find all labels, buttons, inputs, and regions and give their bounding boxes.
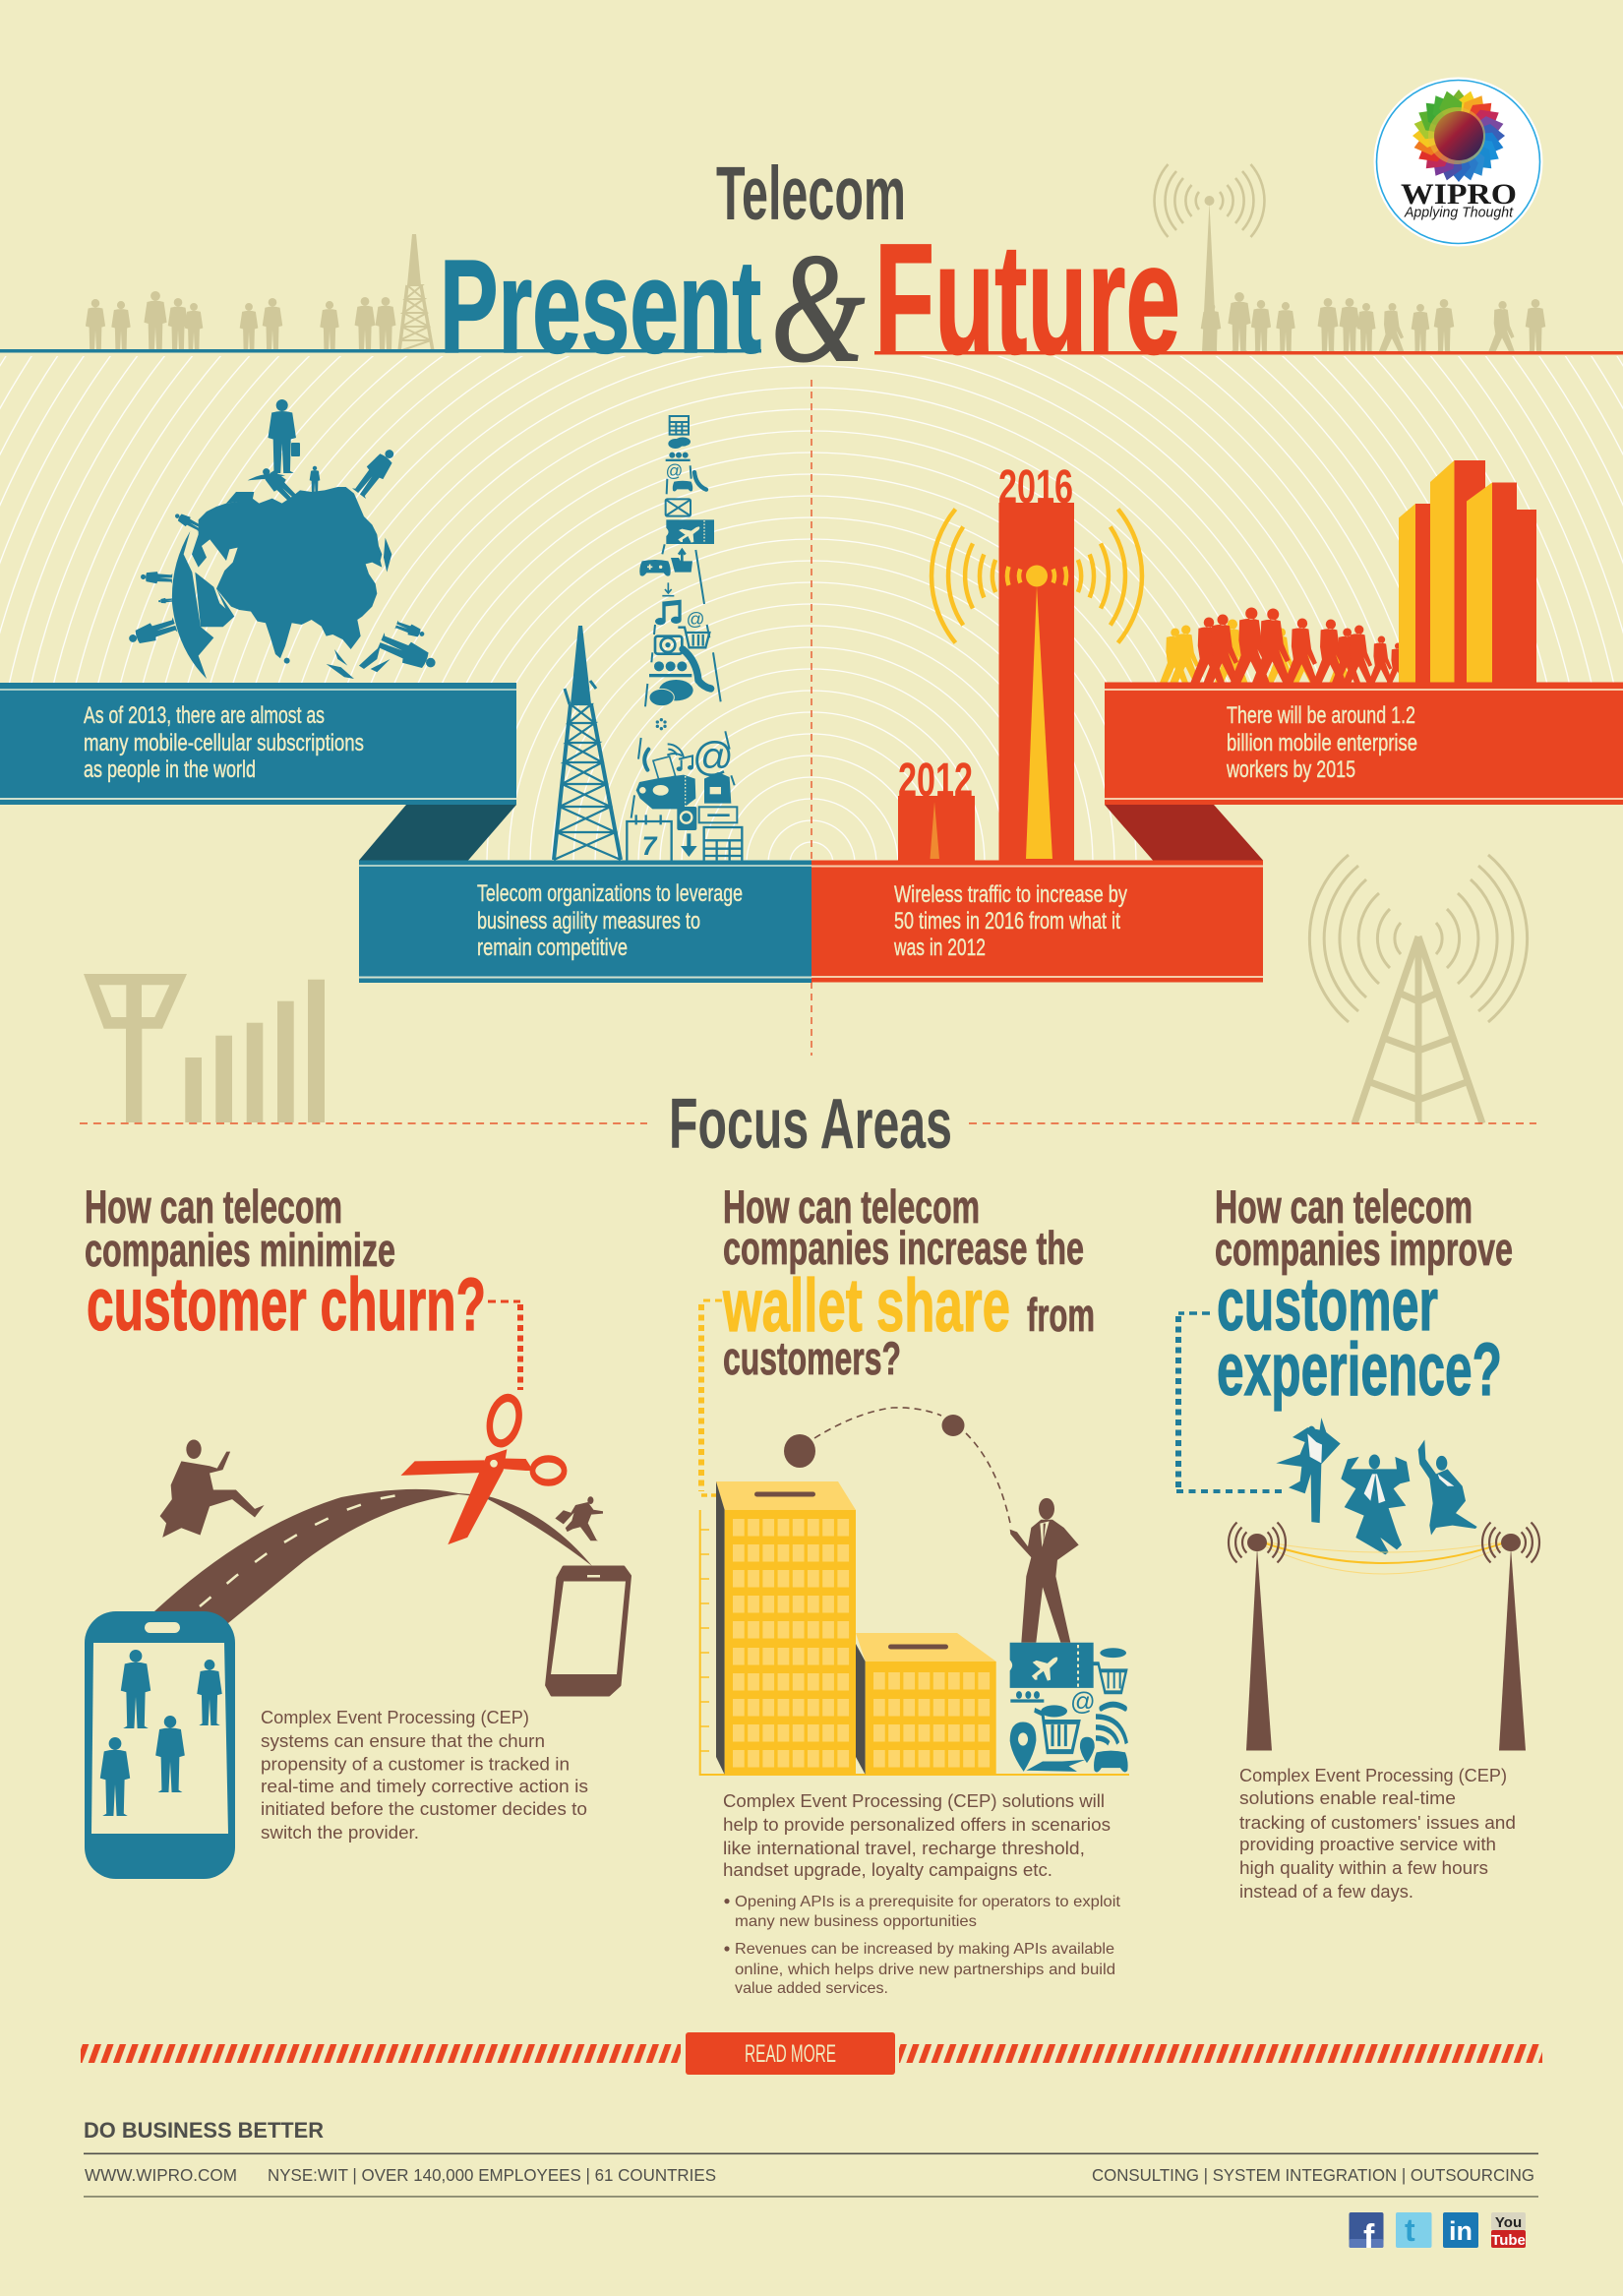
text: experience CEP: solutions enable real-time xyxy=(1239,1788,1456,1808)
heading: wallet question: How can telecom xyxy=(723,1180,980,1233)
footer website: WWW.WIPRO.COM xyxy=(85,2165,237,2185)
heading: experience question: customer xyxy=(1217,1263,1438,1347)
icon: at sign and phone: @ xyxy=(666,460,683,480)
text: experience CEP: Complex Event Processing (CEP) xyxy=(1239,1766,1507,1785)
icon: down arrow xyxy=(681,833,697,857)
background tan tower with waves xyxy=(1309,855,1528,1123)
Wipro logo: WIPRO xyxy=(1401,178,1517,211)
road xyxy=(154,1489,592,1623)
heading: Focus Areas: Focus Areas xyxy=(669,1085,952,1164)
dotted connector red xyxy=(488,1301,520,1390)
text: churn CEP: initiated before the customer decides to xyxy=(261,1799,587,1819)
title: Future: Future xyxy=(874,211,1180,387)
text: business agility: Telecom organizations to leverage xyxy=(477,880,743,907)
icon: gamepad xyxy=(1094,1751,1128,1772)
heading: wallet question: wallet share xyxy=(722,1264,1010,1348)
heading: wallet question: customers? xyxy=(723,1332,901,1384)
text: wireless traffic: 50 times in 2016 from what it xyxy=(894,908,1120,935)
icon: music and download xyxy=(655,582,682,625)
globe with business people xyxy=(127,399,440,679)
icon: facebook xyxy=(1350,2212,1383,2256)
text: mobile subscriptions: As of 2013, there are almost as xyxy=(84,702,325,729)
text: enterprise workers: There will be around 1.2 xyxy=(1227,702,1415,729)
icon: calendar xyxy=(627,815,672,863)
footer rule bottom xyxy=(84,2196,1538,2198)
text: wireless traffic: was in 2012 xyxy=(893,935,986,961)
text: churn CEP: switch the provider. xyxy=(261,1823,419,1843)
heading: churn question xyxy=(85,1180,486,1347)
icon: yellow signal waves xyxy=(932,510,1142,643)
text: enterprise workers: billion mobile enterprise xyxy=(1227,730,1417,756)
text: business agility: business agility measures to xyxy=(477,908,700,935)
horizon line blue xyxy=(0,349,761,352)
text: experience CEP: providing proactive service with xyxy=(1239,1835,1496,1854)
text: churn CEP: propensity of a customer is tracked in xyxy=(261,1755,570,1775)
text: churn CEP: real-time and timely corrective action is xyxy=(261,1777,588,1796)
icon: calculator bottom xyxy=(704,827,742,862)
icon: at sign and phone xyxy=(666,460,706,491)
icon: big runner xyxy=(160,1440,265,1538)
short yellow building xyxy=(856,1633,996,1775)
text: wallet CEP: help to provide personalized offers in scenarios xyxy=(723,1815,1111,1835)
heading: experience question xyxy=(1215,1180,1513,1412)
text: wireless traffic: Wireless traffic to increase by xyxy=(894,881,1127,908)
icon: facebook: f xyxy=(1363,2218,1375,2256)
walking crowd on red ribbon xyxy=(1160,608,1417,683)
heading: churn question: companies minimize xyxy=(85,1224,395,1276)
icon: yellow wire xyxy=(1257,1541,1511,1574)
people silhouettes skyline right xyxy=(1201,292,1545,352)
icon: chat and group xyxy=(666,437,691,461)
icon: at sign: @ xyxy=(1070,1688,1096,1716)
title: ampersand: & xyxy=(771,222,865,394)
text: wallet CEP: like international travel, recharge threshold, xyxy=(723,1839,1085,1858)
icon: wifi xyxy=(1096,1717,1126,1743)
dotted connector blue xyxy=(1176,1313,1282,1491)
panel: upper red ribbon xyxy=(1105,683,1623,805)
heading: wallet question: companies increase the xyxy=(723,1222,1084,1274)
footer rule top xyxy=(84,2152,1538,2154)
text: wallet CEP: Complex Event Processing (CEP) solutions will xyxy=(723,1791,1105,1811)
icon: small cart xyxy=(1090,1648,1126,1692)
city buildings xyxy=(1399,460,1536,683)
tan mast with signal arcs xyxy=(1155,164,1264,352)
icon: linkedin xyxy=(1443,2212,1478,2248)
bar 2012: 2012 xyxy=(898,755,973,807)
icon: chat bubbles xyxy=(649,680,693,706)
text: enterprise workers: workers by 2015 xyxy=(1226,756,1355,783)
heading: churn question: How can telecom xyxy=(85,1180,342,1233)
icon: small brown phone xyxy=(547,1567,630,1695)
text: experience CEP: instead of a few days. xyxy=(1239,1882,1413,1902)
icon: card rectangle xyxy=(699,807,737,822)
striped divider xyxy=(81,2044,1542,2063)
text: experience CEP: high quality within a few hours xyxy=(1239,1858,1488,1878)
social icons xyxy=(1350,2212,1526,2256)
read more button: READ MORE xyxy=(745,2040,836,2068)
icon: handset and people xyxy=(649,649,711,689)
title: Present: Present xyxy=(440,232,761,381)
bullet: revenues xyxy=(724,1941,1115,1997)
icon: linkedin: in xyxy=(1449,2216,1473,2246)
text: churn CEP: Complex Event Processing (CEP) xyxy=(261,1708,529,1727)
dotted connector yellow xyxy=(701,1300,722,1495)
heading: churn question: customer churn? xyxy=(87,1263,486,1347)
icon tower xyxy=(627,416,742,863)
coins and toss path xyxy=(784,1408,1011,1528)
icon: flight ticket xyxy=(1010,1643,1094,1688)
Wipro logo: Applying Thought xyxy=(1404,205,1514,220)
read more button xyxy=(686,2032,895,2075)
bar chart: 2012 vs 2016 traffic xyxy=(898,461,1142,860)
icon: envelope xyxy=(666,499,691,516)
icon: youtube: Tube xyxy=(1491,2232,1526,2249)
icon: small runner xyxy=(555,1496,603,1541)
icon: gamepad and folder xyxy=(639,550,692,576)
icon: twitter xyxy=(1396,2212,1432,2248)
title: Telecom: Telecom xyxy=(716,151,906,236)
icon: jumping people xyxy=(1276,1418,1477,1554)
icon: left antenna xyxy=(1229,1523,1286,1751)
text: mobile subscriptions: many mobile-cellular subscriptions xyxy=(84,730,364,756)
icon: large map pin xyxy=(1010,1722,1036,1772)
icon: scissors xyxy=(400,1392,565,1544)
text: experience CEP xyxy=(1239,1766,1516,1902)
background tan signal icon xyxy=(84,974,325,1122)
footer services: CONSULTING | SYSTEM INTEGRATION | OUTSOURCING xyxy=(1092,2165,1534,2185)
bar 2016: 2016 xyxy=(998,461,1073,514)
bullet: revenues: online, which helps drive new partnerships and build xyxy=(735,1962,1115,1978)
concentric signal arcs background xyxy=(0,356,1623,860)
icon: calendar: 7 xyxy=(642,831,658,861)
panel: wallet share xyxy=(700,1180,1129,1997)
icon: people row xyxy=(1010,1691,1044,1703)
text: churn CEP: systems can ensure that the churn xyxy=(261,1731,545,1751)
icon: camera block xyxy=(704,772,731,804)
panel: lower blue ribbon xyxy=(359,860,812,983)
text: business agility: remain competitive xyxy=(477,935,628,961)
horizon line red xyxy=(874,351,1623,354)
bar 2012 xyxy=(898,755,975,860)
text: enterprise workers xyxy=(1226,702,1417,783)
panel: customer experience xyxy=(1176,1180,1539,1902)
icon: small map pin xyxy=(1080,1737,1095,1763)
icon: zigzag base xyxy=(1026,1760,1085,1772)
icon: jumbled ticket block xyxy=(636,775,695,809)
icon: at sign, cart and camera xyxy=(655,609,709,654)
text: wallet CEP: handset upgrade, loyalty campaigns etc. xyxy=(723,1860,1052,1880)
text: wallet CEP xyxy=(723,1791,1111,1880)
text: churn CEP xyxy=(261,1708,588,1843)
icon: calculator top xyxy=(670,416,689,435)
icon: flight ticket xyxy=(666,519,714,544)
Wipro logo xyxy=(1373,77,1542,246)
bullet: opening APIs: Opening APIs is a prerequisite for operators to exploit xyxy=(735,1894,1121,1910)
icon: music player xyxy=(677,807,696,830)
heading: experience question: How can telecom xyxy=(1215,1180,1473,1233)
heading: wallet question xyxy=(722,1180,1095,1384)
icon: phone, wifi, document xyxy=(644,744,693,780)
icon: handset xyxy=(1101,1705,1125,1709)
people silhouettes skyline left xyxy=(86,291,395,351)
text: experience CEP: tracking of customers' issues and xyxy=(1239,1813,1516,1833)
icon: at sign, cart and camera: @ xyxy=(687,609,705,630)
icon: flower dots xyxy=(656,718,667,730)
bullet: revenues: Revenues can be increased by making APIs available xyxy=(735,1941,1114,1958)
icon: youtube xyxy=(1491,2212,1526,2249)
panel: customer churn xyxy=(85,1180,630,1879)
footer company facts: NYSE:WIT | OVER 140,000 EMPLOYEES | 61 COUNTRIES xyxy=(268,2165,716,2185)
panel: left blue ribbon xyxy=(0,683,516,805)
panel: lower red ribbon xyxy=(812,860,1263,982)
text: wireless traffic xyxy=(893,881,1127,961)
footer tagline: DO BUSINESS BETTER xyxy=(84,2118,324,2143)
blue lattice tower xyxy=(554,626,621,860)
tan lattice tower in skyline xyxy=(399,234,433,351)
icon: large cart xyxy=(1035,1705,1079,1752)
icon: businessman xyxy=(1010,1498,1079,1643)
icon: large at sign: @ xyxy=(692,734,734,779)
icon: twitter: t xyxy=(1405,2212,1415,2248)
icon block: ticket, cart, gadgets xyxy=(1010,1643,1128,1772)
bar 2016 xyxy=(998,461,1074,860)
tall yellow building xyxy=(716,1481,856,1775)
focus divider lines xyxy=(80,1122,1536,1124)
text: mobile subscriptions xyxy=(84,702,364,783)
bullet: revenues: value added services. xyxy=(735,1980,888,1997)
icon: youtube: You xyxy=(1495,2214,1522,2231)
bullet: opening APIs xyxy=(724,1894,1121,1930)
icon: blue phone with people xyxy=(85,1611,235,1879)
bullet: opening APIs: many new business opportunities xyxy=(735,1913,977,1930)
text: mobile subscriptions: as people in the world xyxy=(84,756,256,783)
panel: right red fold xyxy=(1105,805,1263,860)
panel: left blue fold xyxy=(359,805,516,860)
ruler xyxy=(700,1510,1129,1775)
icon: right antenna xyxy=(1482,1523,1539,1751)
text: business agility xyxy=(477,880,743,961)
heading: wallet question: from xyxy=(1027,1289,1095,1341)
tower outline dashes xyxy=(631,465,735,818)
centre dashed divider xyxy=(811,380,812,1056)
